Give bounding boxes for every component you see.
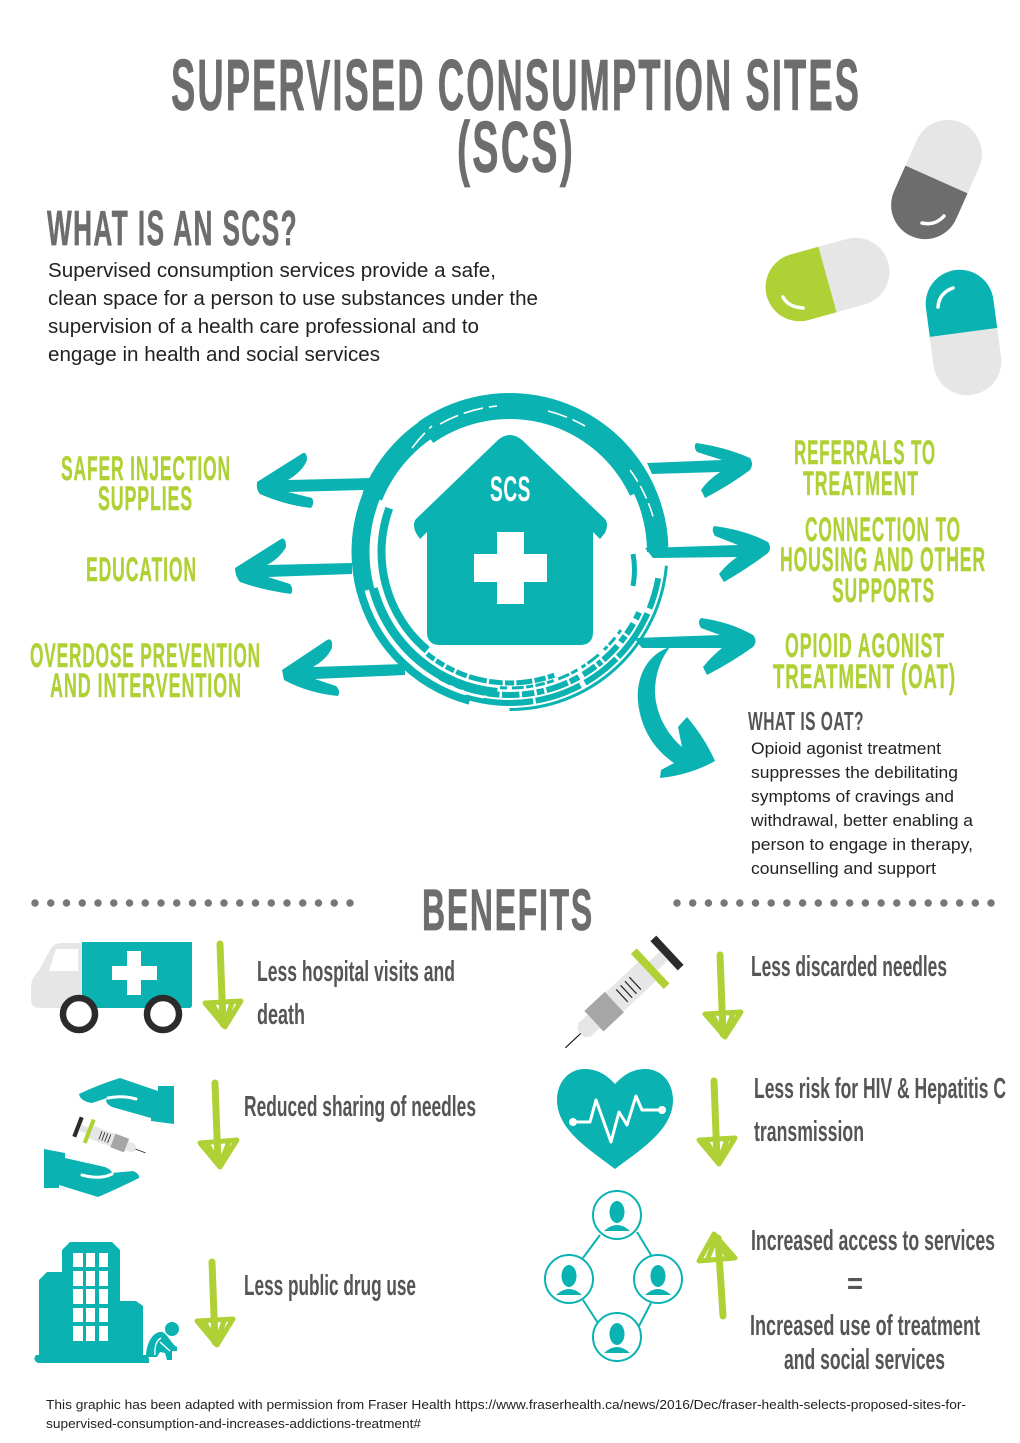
arrow: to referrals [647,443,752,498]
text block: OAT definition: suppresses the debilitating [751,763,958,782]
labels: left services: SUPPLIES [98,480,193,518]
arrow: curved to what is OAT [638,647,715,778]
title: (SCS) [457,108,575,188]
labels: left services: AND INTERVENTION [50,667,242,705]
text block: SCS definition: engage in health and social services [48,343,380,366]
footer source note: supervised-consumption-and-increases-addictions-treatment# [46,1416,422,1431]
icon: SCS house [414,435,607,645]
labels: left services: SAFER INJECTION [61,450,231,488]
heading: benefits: BENEFITS [422,878,594,943]
arrow: down, hospital visits [205,944,241,1027]
arrow: down, discarded needles [705,955,741,1037]
arrow: to OAT [634,618,756,675]
text block: OAT definition: symptoms of cravings and [751,787,954,806]
icon: SCS house: SCS [490,470,531,509]
arrow: to housing [645,526,770,582]
arrow: down, public drug use [197,1262,233,1345]
text: reduced sharing of needles: Reduced sharing of needles [244,1091,476,1123]
text block: OAT definition: counselling and support [751,859,936,878]
footer source note: This graphic has been adapted with permission from Fraser Health https://www.fraserhealth.ca/news/2016/Dec/fraser-health-selects-proposed-sites-for- [46,1397,966,1412]
text: less hospital visits and death: death [257,999,305,1031]
brush circle [306,349,713,755]
text: increased access and use: = [847,1268,863,1300]
footer source note [46,1397,966,1431]
text: increased access and use [750,1225,995,1376]
heading: what is OAT: WHAT IS OAT? [748,706,864,736]
arrow: down, HIV and hepatitis risk [699,1081,735,1164]
text: less hospital visits and death: Less hospital visits and [257,956,455,988]
arrow: to safer injection supplies [257,453,372,508]
text: less risk for HIV and hepatitis C [754,1073,1006,1148]
icon: ambulance [31,942,192,1030]
icon: syringe [549,933,686,1065]
text block: SCS definition [48,259,538,366]
icon: green pill [758,230,897,329]
text block: SCS definition: clean space for a person to use substances under the [48,287,538,310]
labels: right services: TREATMENT [803,465,919,503]
labels: right services [773,434,986,696]
text block: OAT definition: person to engage in therapy, [751,835,973,854]
icon: hands passing syringe [44,1078,174,1197]
labels: left services [30,450,261,705]
icon: building with person [34,1242,179,1363]
text block: SCS definition: supervision of a health care professional and to [48,315,479,338]
text block: OAT definition [750,739,974,878]
icon: grey pill [880,109,993,250]
arrow: down, sharing of needles [200,1083,237,1167]
heading: what is an SCS: WHAT IS AN SCS? [47,202,298,256]
text block: SCS definition: Supervised consumption services provide a safe, [48,259,496,282]
text: less risk for HIV and hepatitis C: transmission [754,1116,864,1148]
arrow: up, access to services [699,1234,735,1316]
arrow: to overdose prevention [282,639,405,696]
icon: heart with pulse [557,1069,673,1169]
labels: left services: OVERDOSE PREVENTION [30,637,261,675]
icon: people network [545,1191,682,1361]
text: less public drug use: Less public drug use [244,1270,416,1302]
text block: OAT definition: Opioid agonist treatment [751,739,941,758]
title [171,46,861,188]
labels: left services: EDUCATION [86,551,197,589]
icon: teal pill [921,266,1006,399]
text: less hospital visits and death [257,956,455,1031]
arrow: to education [235,539,352,594]
text block: OAT definition: withdrawal, better enabling a [750,811,974,830]
